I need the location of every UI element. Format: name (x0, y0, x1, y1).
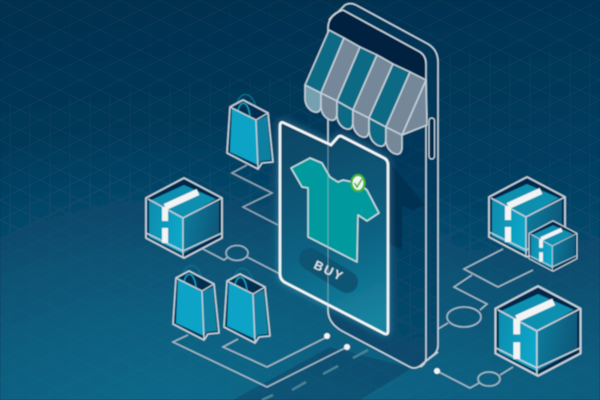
check badge (352, 175, 364, 191)
connector: lower right node (434, 367, 513, 388)
t-shirt (291, 158, 379, 262)
connector: bag A to dot (173, 335, 350, 387)
awning (305, 30, 427, 154)
connector: bag to card (232, 165, 278, 225)
phone (328, 4, 438, 368)
lower right box (495, 286, 581, 376)
awning scallops (305, 85, 402, 154)
upper right large box (489, 177, 565, 257)
phone top dark bezel area (329, 10, 426, 82)
buy button: BUY (312, 258, 346, 284)
left box (146, 178, 222, 258)
dashes on floor (262, 350, 368, 400)
shopping bag lower left (173, 265, 219, 340)
product card (280, 122, 388, 334)
upper right small box (529, 221, 577, 271)
phone outline (328, 4, 438, 368)
phone shadow (388, 160, 425, 250)
connector: bag B to dot (223, 333, 330, 367)
shopping bag top (227, 94, 273, 169)
connector: upper right node (438, 249, 533, 329)
phone edge seen through card (327, 144, 329, 305)
connector: box to card with node (203, 246, 280, 274)
shopping bag lower middle (224, 268, 270, 343)
phone side button (429, 118, 434, 159)
